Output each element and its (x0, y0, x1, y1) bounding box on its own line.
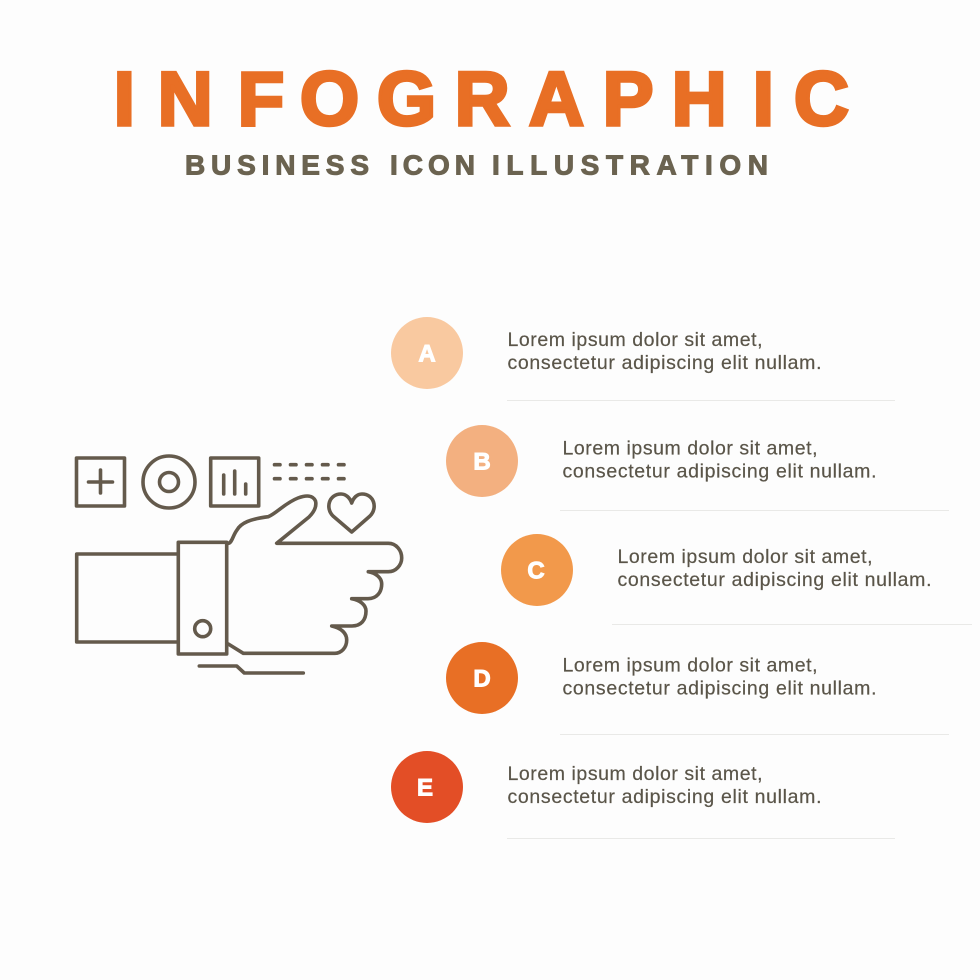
text D: Lorem ipsum dolor sit amet, (562, 654, 818, 676)
letter D: D (473, 666, 491, 692)
circle C (501, 534, 573, 606)
text C (618, 546, 932, 591)
title: INFOGRAPHIC (114, 57, 849, 142)
icon: dashed lines (274, 465, 344, 479)
subtitle (185, 150, 768, 180)
item E (391, 751, 895, 839)
circle A (391, 317, 463, 389)
subtitle: BUSINESS (185, 150, 369, 180)
text A: consectetur adipiscing elit nullam. (508, 352, 822, 374)
text E (508, 763, 822, 808)
text E: Lorem ipsum dolor sit amet, (508, 763, 762, 785)
text B: consectetur adipiscing elit nullam. (562, 460, 876, 482)
icon: bar chart box (211, 458, 259, 506)
text D: consectetur adipiscing elit nullam. (562, 678, 876, 700)
icon: hand outline (228, 496, 402, 653)
letter B: B (473, 448, 491, 476)
icon: heart (329, 494, 374, 532)
letter C: C (527, 558, 545, 584)
circle D (446, 642, 518, 714)
subtitle: ILLUSTRATION (492, 150, 768, 180)
letter A: A (418, 340, 436, 368)
item B (446, 425, 949, 511)
circle E (391, 751, 463, 823)
circle B (446, 425, 518, 497)
text E: consectetur adipiscing elit nullam. (508, 786, 822, 808)
icon: underline stroke (199, 666, 303, 673)
text B: Lorem ipsum dolor sit amet, (562, 438, 818, 460)
icon: cuff (178, 542, 227, 654)
text B (562, 438, 876, 482)
icon: hand pointing with heart and interface symbols (76, 456, 402, 673)
item C (501, 534, 972, 625)
subtitle: ICON (390, 150, 475, 180)
item D (446, 642, 949, 735)
text C: consectetur adipiscing elit nullam. (618, 569, 932, 591)
icon: plus box (76, 458, 124, 506)
icon: sleeve (77, 554, 177, 642)
icon: cuff button (195, 621, 211, 637)
text A (508, 329, 822, 374)
letter E: E (417, 774, 433, 802)
item A (391, 317, 895, 401)
text D (562, 654, 876, 700)
text C: Lorem ipsum dolor sit amet, (618, 546, 872, 568)
text A: Lorem ipsum dolor sit amet, (508, 329, 762, 351)
icon: target circle (143, 456, 195, 508)
